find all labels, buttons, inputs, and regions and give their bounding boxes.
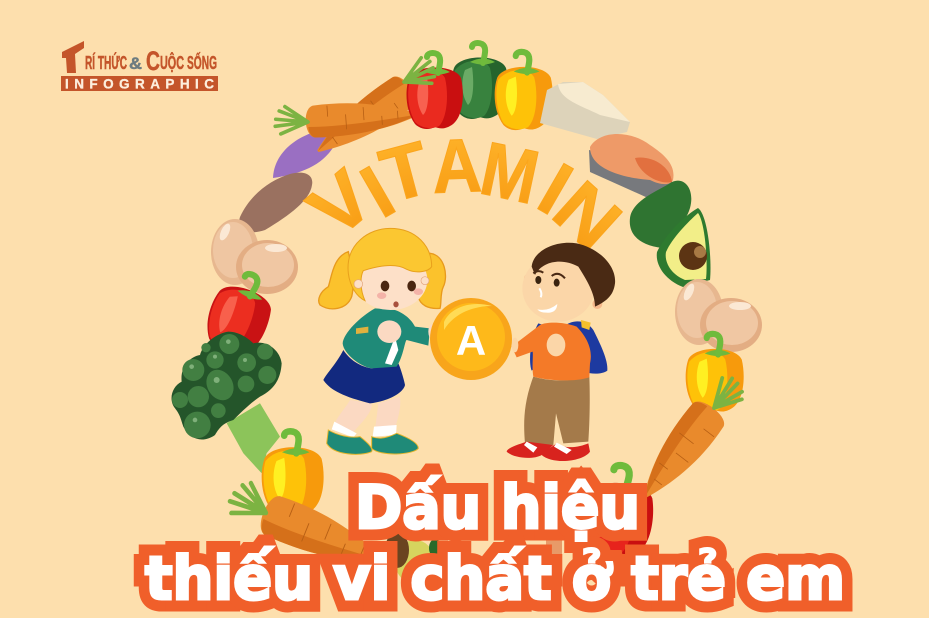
title fill: Dấu hiệu: [355, 473, 640, 543]
icon: salmon steak: [589, 134, 673, 198]
heading: VITAMIN arc: N: [537, 164, 638, 267]
icon: broccoli: [172, 332, 282, 473]
icon: back carrot: [308, 72, 420, 166]
icon: purple yam: [273, 130, 334, 178]
icon: bottom-right red pepper: [582, 463, 657, 559]
girl: facial features: [354, 277, 429, 307]
icon: green pepper: [452, 43, 508, 119]
boy: shirt: [512, 323, 591, 380]
icon: yellow pepper: [495, 52, 553, 130]
logo wordmark: &: [129, 54, 142, 73]
icon: sweet potato: [239, 173, 312, 232]
icon: yellow pepper right: [686, 334, 744, 412]
girl: jacket: [343, 308, 430, 368]
heading: VITAMIN arc: T: [372, 125, 439, 220]
icon: cheese: [540, 82, 630, 139]
icon: bottom green leaf: [429, 539, 441, 557]
logo wordmark: UỘC: [160, 52, 184, 73]
icon: red pepper left: [199, 265, 282, 360]
icon: yellow pepper left: [262, 431, 324, 515]
food ring: [172, 43, 762, 584]
heading: VITAMIN arc: I: [525, 147, 586, 231]
icon: avocado whole: [630, 181, 691, 248]
logo wordmark: [85, 46, 217, 76]
boy: facial features: [533, 271, 565, 313]
boy: socks: [524, 442, 572, 454]
title outline: thiếu vi chất ở trẻ em: [145, 544, 845, 614]
girl: jacket strip and hands: [356, 320, 435, 365]
illustration: boy: [507, 243, 615, 461]
girl: hair: [348, 228, 432, 301]
icon: bottom avocado piece: [385, 532, 435, 584]
icon: front carrot: [274, 97, 419, 141]
title fill: [145, 473, 845, 614]
logo wordmark: RÍ THỨC: [85, 52, 127, 73]
boy: shoes: [507, 442, 590, 461]
vitamin A badge: A: [456, 317, 486, 364]
icon: bottom-left carrot: [223, 478, 392, 580]
boy: backpack: [530, 321, 607, 374]
heading: VITAMIN arc: M: [474, 126, 546, 221]
logo band text: INFOGRAPHIC: [65, 76, 214, 92]
icon: avocado half: [657, 208, 710, 287]
girl: socks: [332, 422, 397, 437]
icon: red pepper: [407, 53, 463, 129]
heading: VITAMIN arc: [292, 124, 638, 267]
title outline: [145, 473, 845, 614]
logo wordmark: SỐNG: [187, 52, 217, 73]
girl: pigtails: [319, 252, 445, 309]
boy: hands: [512, 334, 565, 356]
logo wordmark: C: [146, 46, 160, 76]
icon: bottom salmon piece: [546, 538, 562, 572]
icon: right carrot leaves: [705, 374, 748, 418]
logo band: [61, 76, 218, 91]
title outline: Dấu hiệu: [355, 473, 640, 543]
boy: backpack patch: [581, 320, 591, 330]
icon: carrot leaves top: [398, 55, 441, 96]
heading: VITAMIN arc: I: [347, 150, 408, 234]
title: [145, 473, 845, 614]
illustration: girl: [319, 228, 445, 454]
boy: hair: [532, 243, 615, 307]
girl: face: [354, 250, 427, 310]
icon: eggs right: [675, 279, 762, 352]
title fill: thiếu vi chất ở trẻ em: [145, 544, 845, 614]
icon: right carrot: [629, 396, 729, 509]
boy: pants: [524, 377, 590, 445]
logo: Tri Thuc & Cuoc Song Infographic: [61, 41, 218, 92]
logo icon: T roof: [62, 41, 84, 73]
icon: eggs left: [211, 219, 298, 294]
boy: head: [522, 255, 602, 322]
vitamin A badge: [430, 298, 512, 380]
heading: VITAMIN arc: A: [431, 124, 483, 210]
girl: legs: [333, 397, 400, 437]
girl: shoes: [327, 430, 418, 454]
heading: VITAMIN arc: V: [292, 153, 389, 254]
girl: skirt: [323, 350, 405, 403]
